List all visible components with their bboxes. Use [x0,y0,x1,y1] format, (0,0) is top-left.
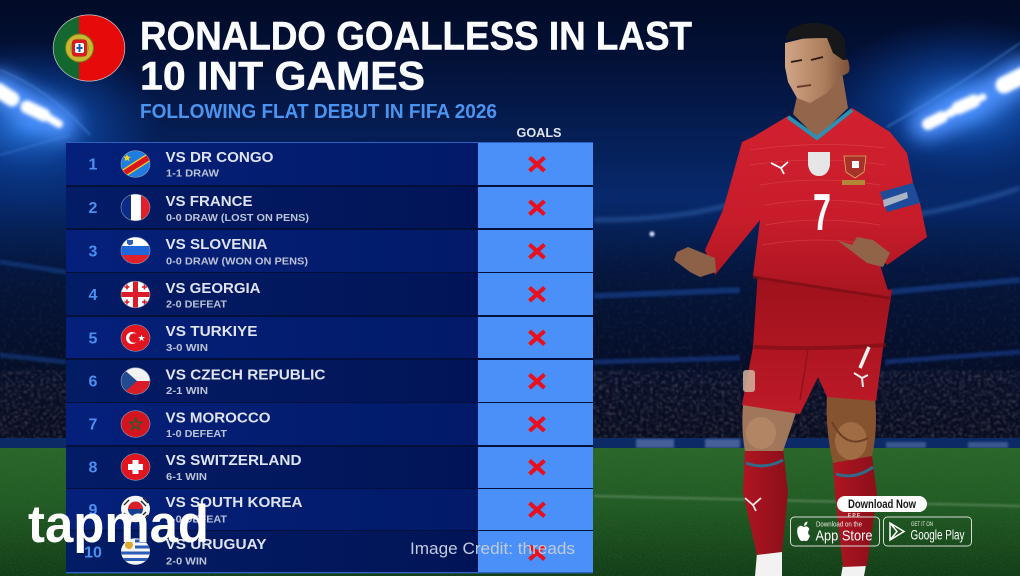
row 2: 2 [89,200,98,217]
neck [793,72,848,138]
row 7 [66,403,593,445]
row 7: 7 [89,416,98,434]
icon: Uruguay flag [121,538,150,565]
row 8: 6-1 WIN [166,472,207,483]
row 9 [66,489,593,530]
row 3: 3 [89,244,98,260]
row 10: VS URUGUAY [166,537,267,553]
row 3: 0-0 DRAW (WON ON PENS) [166,256,308,268]
subtitle: FOLLOWING FLAT DEBUT IN FIFA 2026 [140,101,497,123]
row 5 [66,317,593,358]
icon: Czech Republic flag [120,367,150,395]
row 2: 0-0 DRAW (LOST ON PENS) [166,213,309,224]
icon: Georgia flag [120,280,150,308]
row 6: 2-1 WIN [166,386,208,397]
row 7: 1-0 DEFEAT [166,429,227,440]
row 6: 6 [89,374,98,390]
title [140,14,692,98]
floodlights right [926,74,1020,124]
shirt number: 7 [813,184,831,242]
title: 10 INT GAMES [140,54,425,98]
app store badge: Download on the [816,520,862,528]
row 9: 9 [89,502,98,519]
row 9: 1-0 DEFEAT [166,514,227,526]
floodlights left [0,88,60,124]
row 2 [66,187,593,228]
google play badge: GET IT ON [911,521,933,528]
image credit: Image Credit: threads [410,540,575,558]
row 1: 1 [89,156,98,174]
icon: Morocco flag [120,410,150,438]
row 7: VS MOROCCO [166,410,270,426]
icon: Switzerland flag [120,453,150,481]
row 4: VS GEORGIA [166,281,261,297]
floodlight beams [0,43,1020,155]
row 2: VS FRANCE [166,194,253,210]
app store badge: App Store [816,528,872,544]
row 1: VS DR CONGO [166,150,274,166]
jersey [705,108,927,298]
icon: DR Congo flag [120,150,150,178]
title: RONALDO GOALLESS IN LAST [140,14,692,58]
goals column heading: GOALS [516,126,562,140]
download call to action [790,496,972,546]
row 5: 5 [89,330,98,348]
row 3: VS SLOVENIA [166,237,268,253]
captain armband [880,183,920,212]
row 5: VS TURKIYE [166,324,258,340]
row 3 [66,230,593,272]
icon: Slovenia flag [120,236,150,264]
tapmad logo: tapmad [28,495,209,554]
row 1 [66,143,593,185]
legs [742,392,876,463]
icon: South Korea flag [121,496,150,522]
row 4: 4 [89,287,98,304]
row 5: 3-0 WIN [166,343,208,354]
download now pill: Download Now [848,499,916,511]
row 8: VS SWITZERLAND [166,453,302,469]
icon: France flag [120,194,150,222]
google play badge: Google Play [910,528,965,542]
row 10: 2-0 WIN [166,556,207,568]
row 4 [66,273,593,315]
left hand [674,247,716,277]
row 6: VS CZECH REPUBLIC [166,368,326,384]
app store badge [790,517,880,546]
row 10 [66,531,593,572]
match table [66,142,593,573]
left sock [743,448,788,576]
row 8 [66,447,593,488]
icon: Turkiye flag [120,324,150,352]
row 9: VS SOUTH KOREA [166,495,303,511]
right sock and boot area [833,455,877,576]
shorts [742,270,892,414]
download now pill [837,496,927,512]
row 8: 8 [89,460,98,476]
row 6 [66,360,593,402]
row 10: 10 [84,544,102,562]
right hand [837,237,890,267]
row 4: 2-0 DEFEAT [166,300,227,310]
google play badge [884,517,972,546]
row 1: 1-1 DRAW [166,168,220,180]
head [785,23,850,103]
icon: Portugal flag [50,12,125,83]
player: Ronaldo [674,23,927,576]
fpf sock print: F P F [848,513,860,519]
